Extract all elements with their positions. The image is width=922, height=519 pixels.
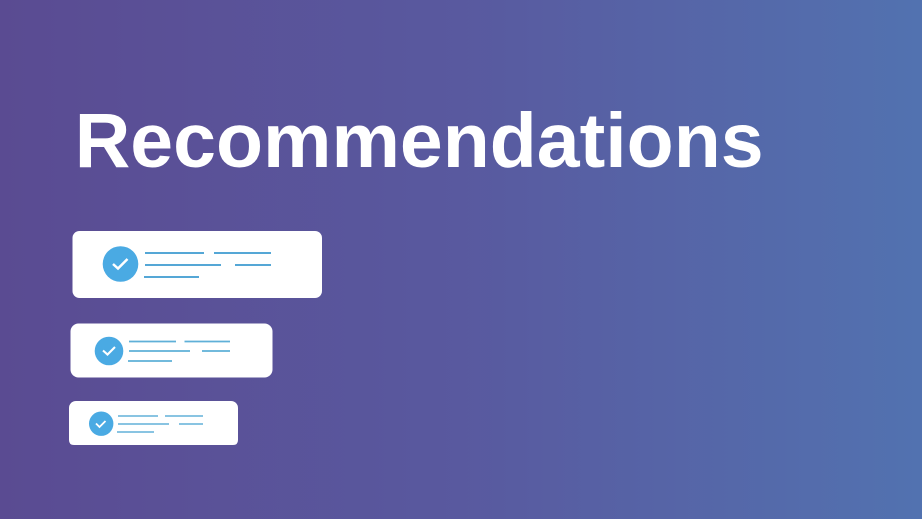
card 2 xyxy=(70,324,272,378)
card 1 xyxy=(72,231,322,298)
card 3 xyxy=(69,401,238,445)
title: Recommendations xyxy=(75,98,764,184)
